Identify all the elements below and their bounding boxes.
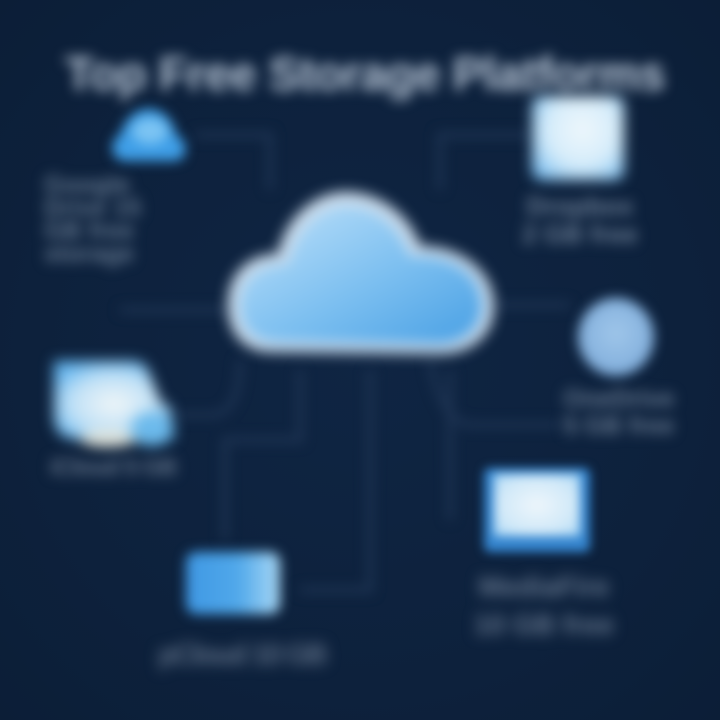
text: top right label: Dropbox (527, 191, 633, 221)
text: top left label (40, 170, 146, 272)
icon: top right panel (532, 96, 624, 180)
text: top left label: storage (44, 240, 134, 268)
text: top left label: Drive 15 (44, 194, 141, 222)
text: top right label: 2 GB free (522, 219, 638, 249)
text: lower right label: 10 GB free (474, 609, 614, 640)
text: right label: 5 GB free (563, 412, 675, 440)
text: top right label (519, 191, 642, 249)
text: top left label: Google (44, 171, 130, 199)
icon: lower right panel (484, 468, 590, 552)
panel screen (494, 474, 580, 536)
text: right label (560, 384, 678, 440)
text: lower right label: MediaFire (479, 571, 609, 602)
text: lower right label (472, 571, 618, 640)
title: Top Free Storage Platforms (65, 47, 665, 100)
icon: top left cloud (104, 100, 194, 170)
icon: right circle (578, 298, 654, 376)
text: top left label: GB free (44, 217, 134, 245)
text: left label: iCloud 5 GB (50, 454, 176, 481)
icon: bottom left box (186, 552, 280, 614)
text: right label: OneDrive (563, 385, 675, 413)
text: bottom left label: pCloud 10 GB (158, 639, 326, 671)
icon: left panel with cloud (43, 350, 184, 458)
